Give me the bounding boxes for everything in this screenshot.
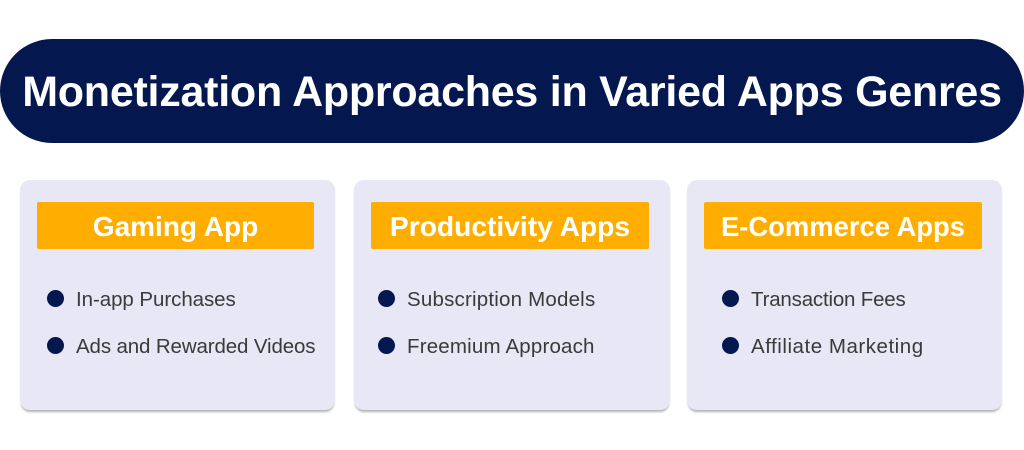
text: subscription models: Subscription Models	[407, 288, 595, 311]
heading: e-commerce apps	[704, 202, 982, 249]
icon: bullet	[722, 290, 739, 307]
title	[0, 39, 1024, 143]
panel: productivity apps	[354, 180, 670, 410]
text: transaction fees: Transaction Fees	[751, 288, 906, 311]
heading: productivity apps: Productivity Apps	[390, 210, 630, 242]
icon: bullet	[47, 290, 64, 307]
panel: gaming app	[20, 180, 335, 410]
icon: bullet	[722, 337, 739, 354]
icon: bullet	[378, 337, 395, 354]
panel: e-commerce apps	[687, 180, 1002, 410]
text: affiliate marketing: Affiliate Marketing	[751, 335, 924, 358]
heading: e-commerce apps: E-Commerce Apps	[721, 211, 965, 242]
text: in-app purchases: In-app Purchases	[76, 288, 236, 311]
text: ads and rewarded videos: Ads and Rewarded Videos	[76, 335, 315, 358]
icon: bullet	[47, 337, 64, 354]
heading: gaming app	[37, 202, 314, 249]
text: freemium approach: Freemium Approach	[407, 335, 595, 358]
heading: productivity apps	[371, 202, 649, 249]
icon: bullet	[378, 290, 395, 307]
heading: gaming app: Gaming App	[93, 211, 258, 242]
title: Monetization Approaches in Varied Apps Genres	[22, 68, 1002, 116]
